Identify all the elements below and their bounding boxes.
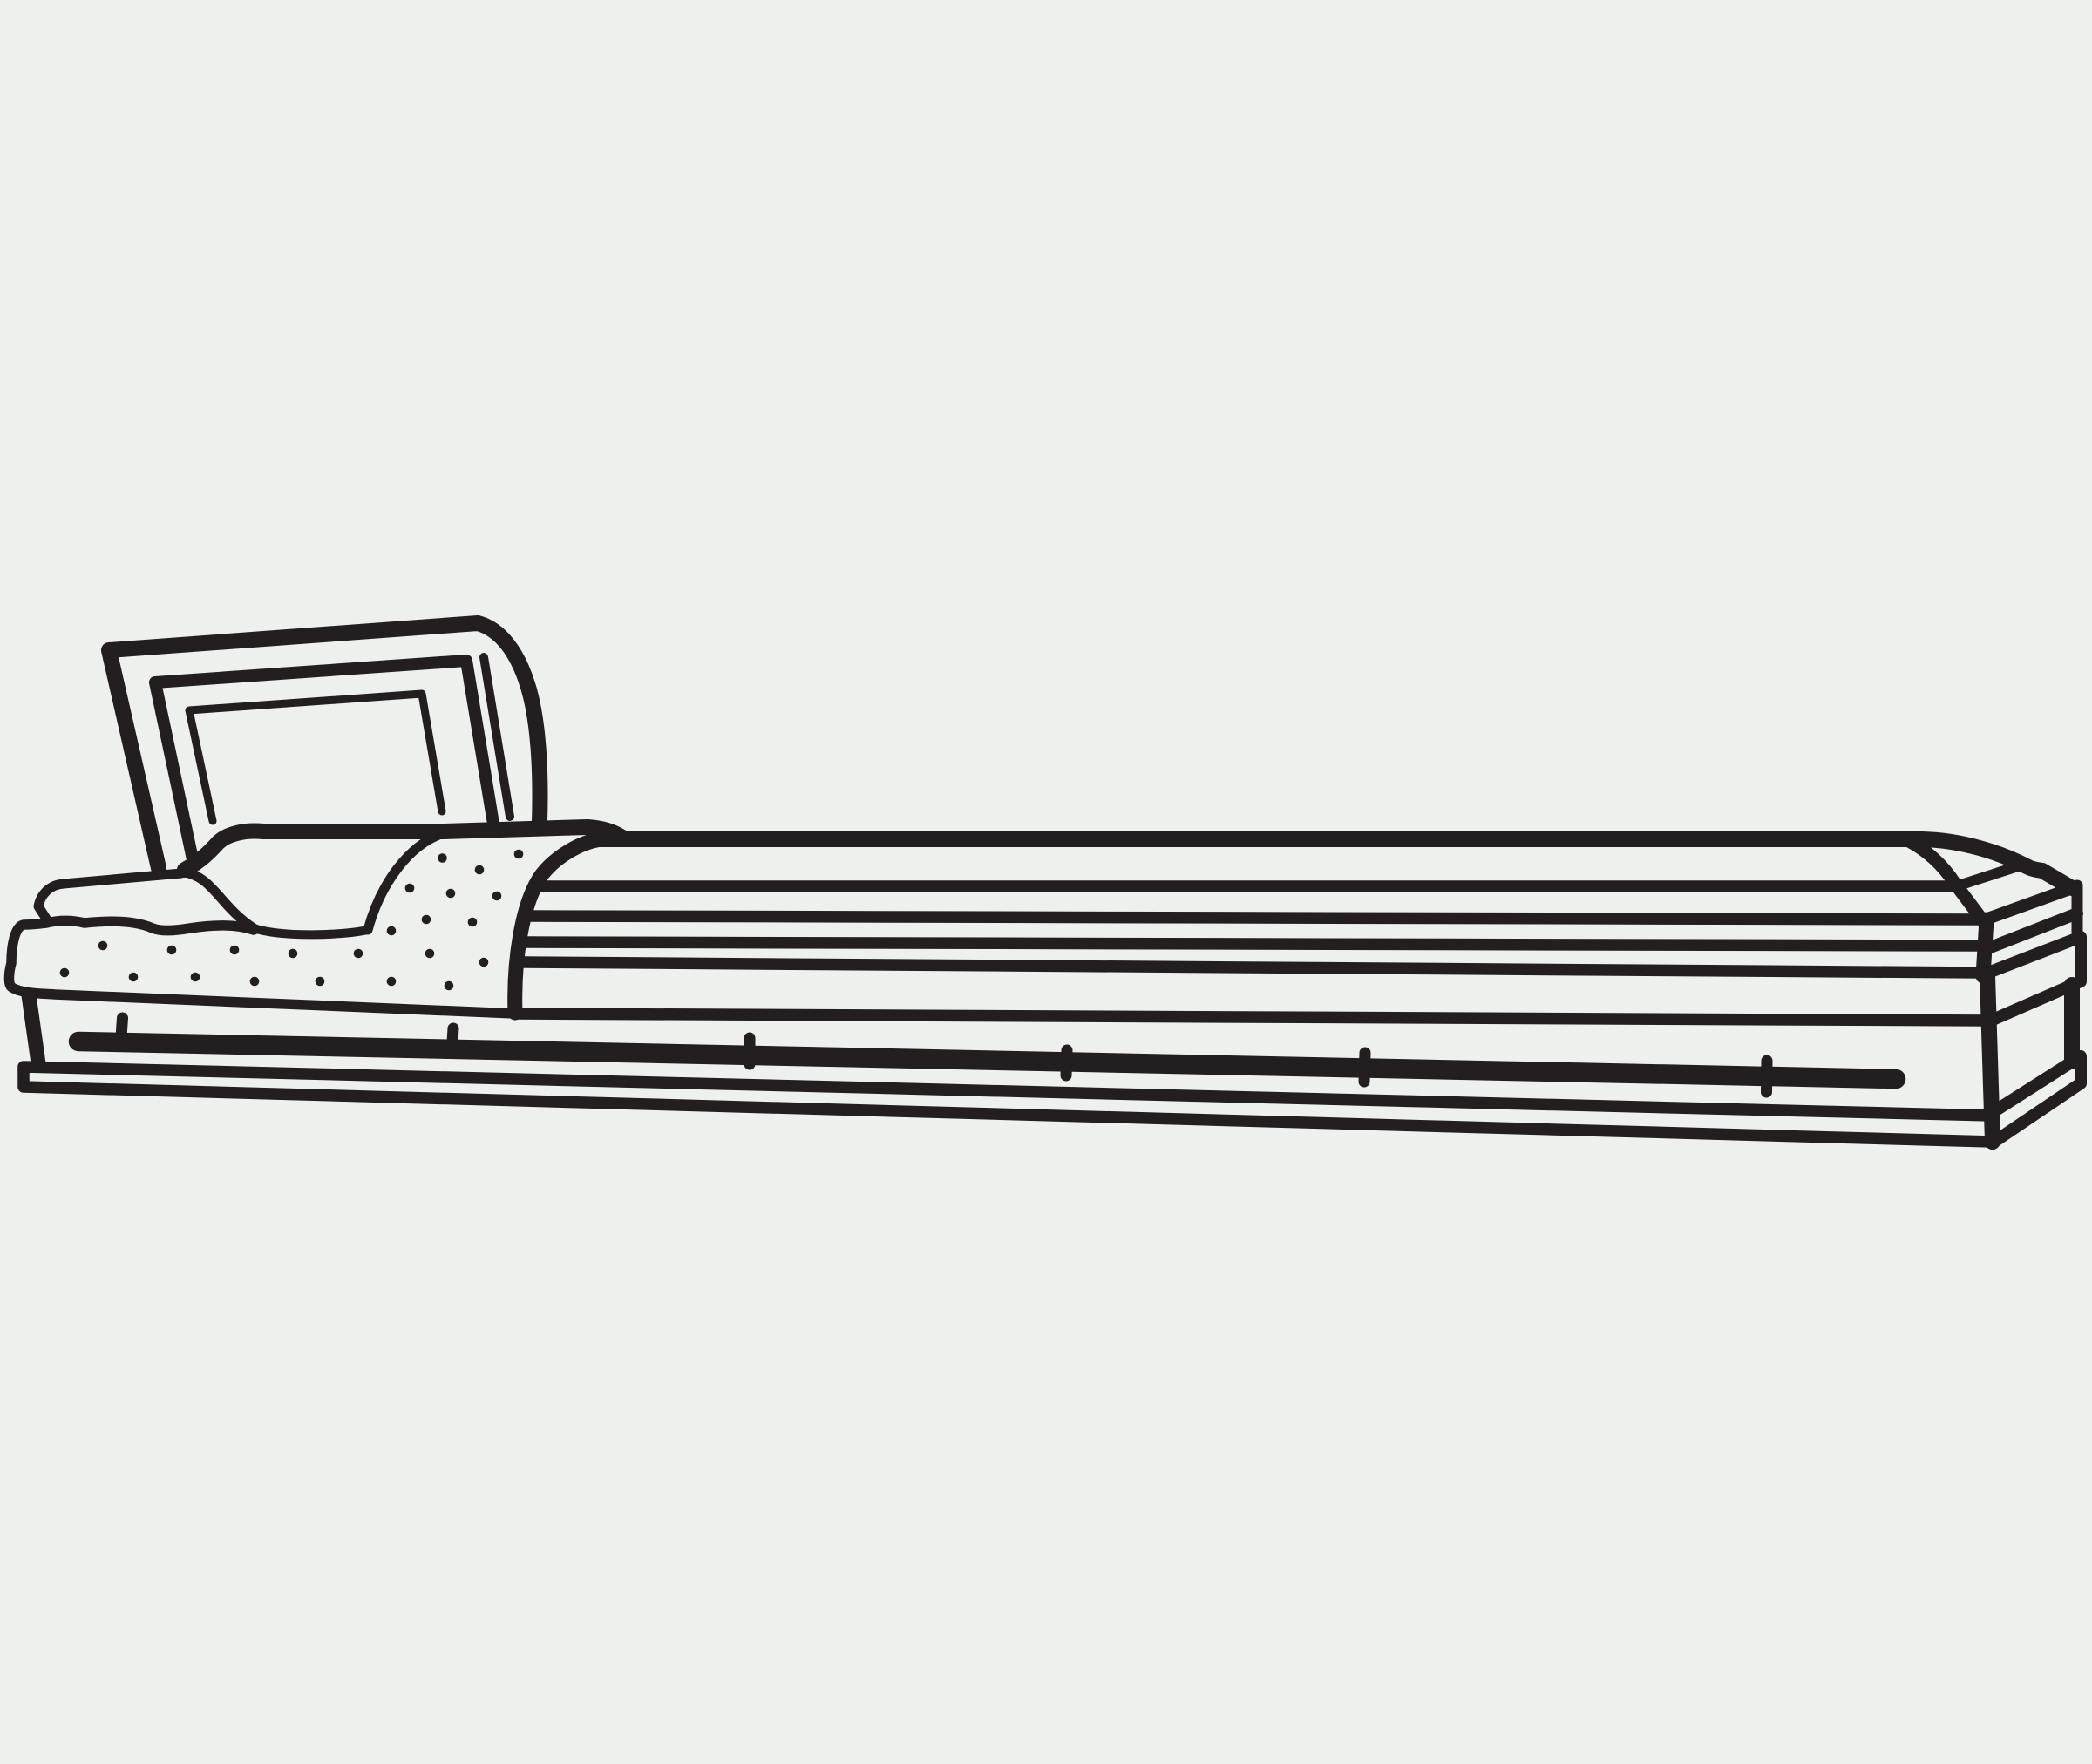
stripe one	[542, 880, 1955, 892]
mattress outline	[9, 920, 515, 1014]
corner post	[1987, 976, 1993, 1142]
closed lid top line	[601, 839, 2072, 888]
plinth	[24, 1067, 1992, 1142]
lid inner frame	[155, 661, 493, 859]
interior top edge	[185, 827, 625, 870]
ruffle left edge	[38, 873, 181, 919]
upper end lines	[1988, 887, 2077, 948]
end base	[1992, 1056, 2081, 1143]
dots on fabric	[60, 850, 523, 990]
rear leg	[2064, 985, 2080, 1062]
stripe two	[530, 916, 1985, 919]
pillow left edge	[181, 872, 254, 928]
left side of body	[29, 995, 38, 1063]
dome arcs	[1909, 841, 1984, 922]
upper front post	[1983, 919, 1987, 976]
pillow bottom edge	[254, 928, 368, 934]
handle posts	[121, 1018, 1767, 1092]
closed lid and stripes	[515, 839, 2072, 1021]
handle bar	[78, 1041, 1896, 1079]
stripe four	[523, 962, 1981, 973]
lid panel line	[189, 694, 442, 821]
stripe three	[525, 942, 1979, 946]
lid side line	[484, 657, 510, 817]
end panel top	[1988, 937, 2081, 1021]
head arc	[515, 839, 601, 1013]
dome cross line	[1961, 865, 2021, 885]
pillow right edge	[368, 834, 441, 930]
open lid	[109, 623, 540, 868]
lid outer frame	[109, 623, 540, 868]
waist line	[515, 1014, 1989, 1021]
lower body	[24, 995, 1992, 1142]
upper right post	[2071, 885, 2083, 933]
foot end of casket	[1909, 841, 2081, 1143]
casket head interior	[9, 827, 625, 1014]
